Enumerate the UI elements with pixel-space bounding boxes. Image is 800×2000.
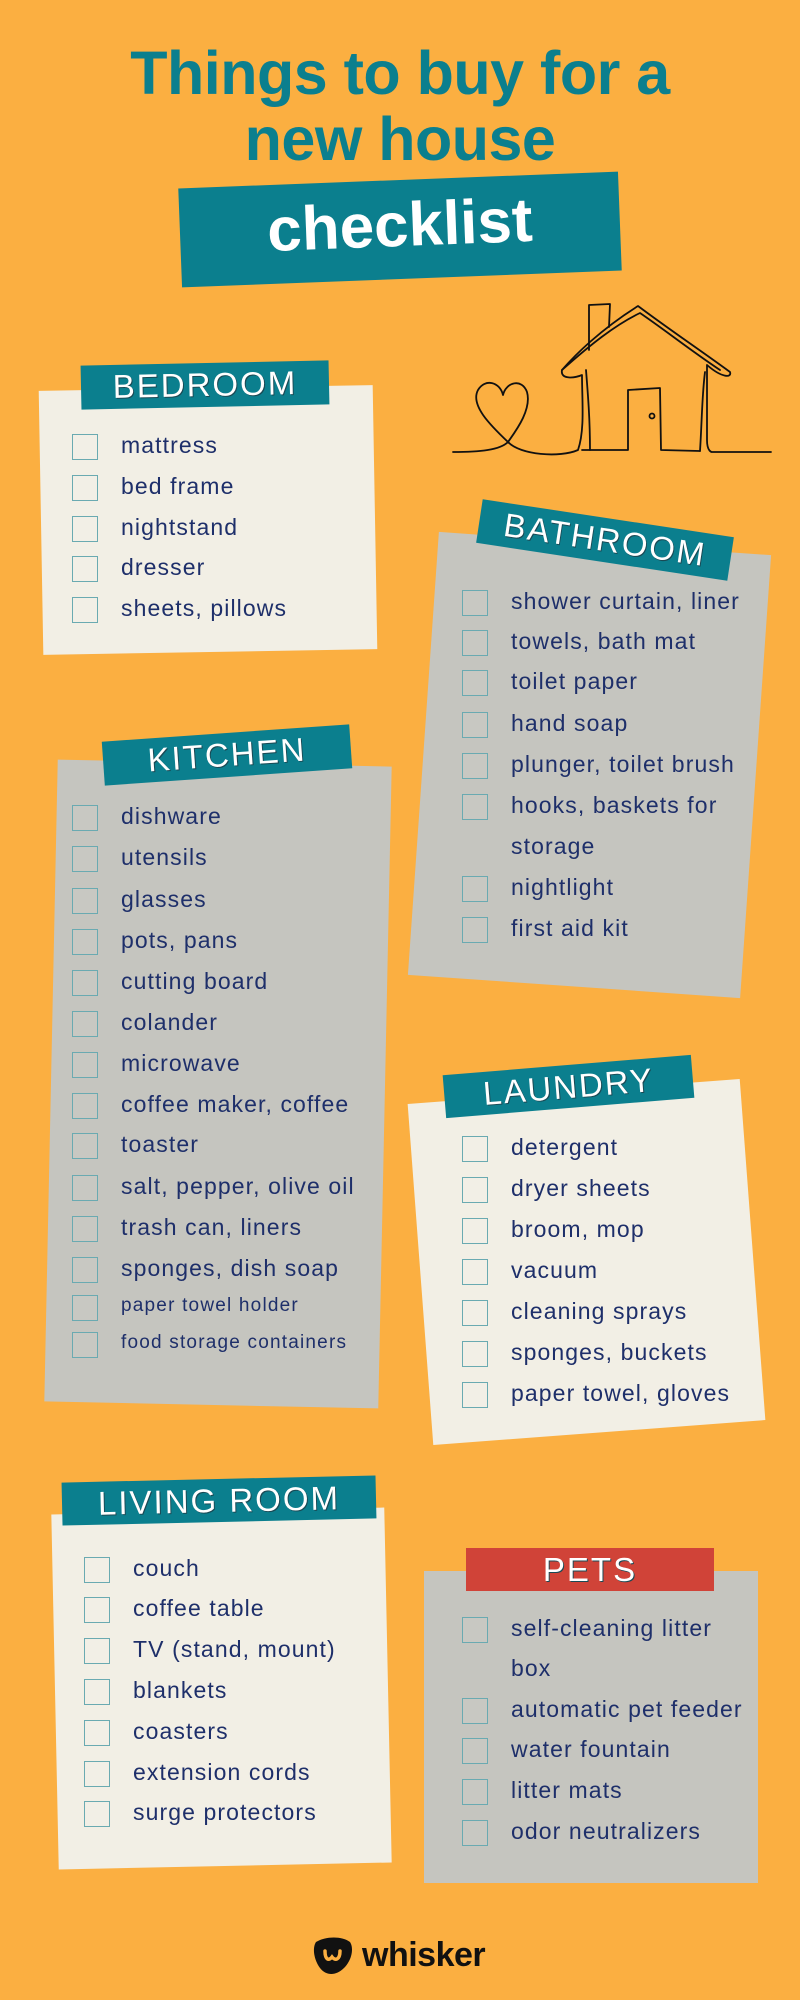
label: bedroom	[81, 360, 329, 410]
list: living room items: TV (stand, mount)	[133, 1636, 336, 1662]
list: kitchen items: salt, pepper, olive oil	[121, 1173, 355, 1199]
list: pets items: box	[511, 1655, 551, 1681]
list: bathroom items: storage	[511, 833, 595, 859]
list: laundry items: dryer sheets	[511, 1175, 651, 1201]
list: kitchen items: cutting board	[121, 968, 268, 994]
list: laundry items: sponges, buckets	[511, 1339, 708, 1365]
list: bathroom items: hand soap	[511, 710, 628, 736]
icon: whisker mark	[314, 1938, 352, 1974]
list: bedroom items: bed frame	[121, 473, 234, 499]
label: living room: LIVING ROOM	[98, 1479, 340, 1521]
list: bathroom items: toilet paper	[511, 668, 638, 694]
list: kitchen items: microwave	[121, 1050, 241, 1076]
panel: living room	[51, 1508, 392, 1869]
list: bedroom items: sheets, pillows	[121, 595, 287, 621]
logo: whisker	[314, 1936, 486, 1974]
label: laundry	[443, 1055, 694, 1118]
checklist banner: checklist	[266, 186, 534, 265]
list: pets items: odor neutralizers	[511, 1818, 701, 1844]
panel: bathroom	[408, 532, 771, 998]
label: laundry: LAUNDRY	[482, 1061, 655, 1111]
list: bathroom items: nightlight	[511, 874, 614, 900]
list: kitchen items: sponges, dish soap	[121, 1255, 339, 1281]
list: bathroom items: hooks, baskets for	[511, 792, 717, 818]
list: kitchen items: paper towel holder	[121, 1295, 299, 1316]
list: kitchen items: pots, pans	[121, 927, 238, 953]
list: bedroom items: dresser	[121, 554, 205, 580]
list: kitchen items: trash can, liners	[121, 1214, 302, 1240]
list: kitchen items: dishware	[121, 803, 222, 829]
list: bathroom items	[462, 588, 740, 943]
list: kitchen items: colander	[121, 1009, 218, 1035]
list: kitchen items: glasses	[121, 886, 207, 912]
list: kitchen items: toaster	[121, 1131, 199, 1157]
panel: bedroom	[39, 385, 377, 655]
list: bedroom items	[72, 432, 287, 623]
list: pets items	[462, 1615, 743, 1846]
list: living room items: coasters	[133, 1718, 229, 1744]
label: bedroom: BEDROOM	[112, 364, 298, 405]
list: kitchen items: utensils	[121, 844, 208, 870]
title: new house	[245, 105, 555, 173]
title: Things to buy for a	[130, 39, 670, 107]
panel: kitchen	[44, 760, 392, 1408]
list: laundry items: vacuum	[511, 1257, 598, 1283]
list: living room items: couch	[133, 1555, 200, 1581]
logo text: whisker	[362, 1936, 485, 1974]
label: bathroom	[476, 499, 734, 581]
list: living room items: extension cords	[133, 1759, 311, 1785]
list: pets items: automatic pet feeder	[511, 1696, 743, 1722]
label: kitchen	[102, 724, 352, 786]
list: pets items: self-cleaning litter	[511, 1615, 712, 1641]
list: living room items: coffee table	[133, 1595, 265, 1621]
list: living room items: surge protectors	[133, 1799, 317, 1825]
list: living room items	[84, 1555, 336, 1827]
checklist banner	[178, 172, 622, 287]
list: bedroom items: mattress	[121, 432, 218, 458]
label: pets: PETS	[543, 1550, 637, 1588]
list: pets items: litter mats	[511, 1777, 623, 1803]
list: laundry items: cleaning sprays	[511, 1298, 687, 1324]
list: bathroom items: shower curtain, liner	[511, 588, 740, 614]
panel: laundry	[408, 1079, 765, 1445]
list: bedroom items: nightstand	[121, 514, 238, 540]
label: pets	[466, 1548, 714, 1591]
list: laundry items	[462, 1134, 730, 1408]
list: laundry items: paper towel, gloves	[511, 1380, 730, 1406]
list: laundry items: detergent	[511, 1134, 618, 1160]
icon: house line drawing	[452, 303, 772, 456]
list: kitchen items	[72, 803, 355, 1358]
panel: pets	[424, 1571, 758, 1883]
list: laundry items: broom, mop	[511, 1216, 645, 1242]
list: kitchen items: coffee maker, coffee	[121, 1091, 349, 1117]
list: kitchen items: food storage containers	[121, 1332, 347, 1353]
list: bathroom items: towels, bath mat	[511, 628, 696, 654]
label: kitchen: KITCHEN	[146, 731, 307, 778]
list: bathroom items: first aid kit	[511, 915, 629, 941]
list: living room items: blankets	[133, 1677, 227, 1703]
list: bathroom items: plunger, toilet brush	[511, 751, 735, 777]
label: bathroom: BATHROOM	[501, 506, 709, 573]
label: living room	[62, 1475, 376, 1526]
list: pets items: water fountain	[511, 1736, 671, 1762]
title	[130, 39, 671, 173]
